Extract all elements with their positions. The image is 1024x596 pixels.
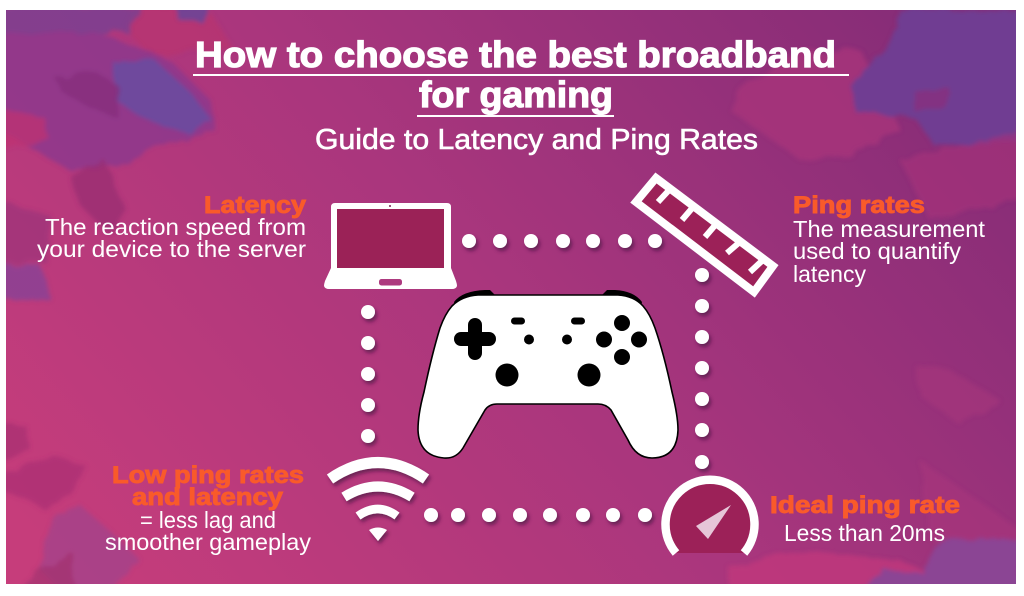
text block: latency: Latency — [204, 192, 307, 219]
text block: low ping rates and latency — [105, 462, 312, 555]
dotted connector: laptop to wifi — [361, 305, 375, 443]
dotted connector: laptop to ruler — [462, 234, 662, 248]
icon: game controller — [418, 290, 678, 458]
icon: ruler — [636, 178, 773, 292]
text block: ping rates: Ping rates — [793, 192, 925, 219]
icon: laptop — [324, 203, 457, 289]
title — [193, 34, 849, 117]
text block: low ping rates and latency: Low ping rates — [112, 462, 304, 489]
dotted connector: wifi to gauge — [424, 508, 652, 522]
title: How to choose the best broadband — [195, 34, 836, 75]
text block: ping rates: The measurement — [793, 216, 986, 242]
title: for gaming — [419, 74, 613, 115]
icon: wifi — [330, 462, 426, 541]
text block: ping rates: used to quantify — [793, 238, 962, 264]
text block: low ping rates and latency: = less lag and — [140, 507, 276, 533]
text block: latency — [37, 192, 307, 262]
dotted connector: ruler to gauge — [695, 268, 709, 469]
subtitle: Guide to Latency and Ping Rates — [315, 124, 758, 156]
text block: ideal ping rate: Less than 20ms — [784, 520, 945, 546]
text block: low ping rates and latency: and latency — [132, 484, 284, 511]
text block: ping rates: latency — [793, 261, 867, 287]
text block: latency: The reaction speed from — [45, 214, 306, 240]
text block: ping rates — [793, 192, 986, 287]
icon: speedometer gauge — [666, 480, 754, 553]
text block: latency: your device to the server — [37, 236, 306, 262]
text block: ideal ping rate: Ideal ping rate — [770, 492, 960, 519]
text block: low ping rates and latency: smoother gameplay — [105, 529, 312, 555]
text block: ideal ping rate — [770, 492, 960, 546]
